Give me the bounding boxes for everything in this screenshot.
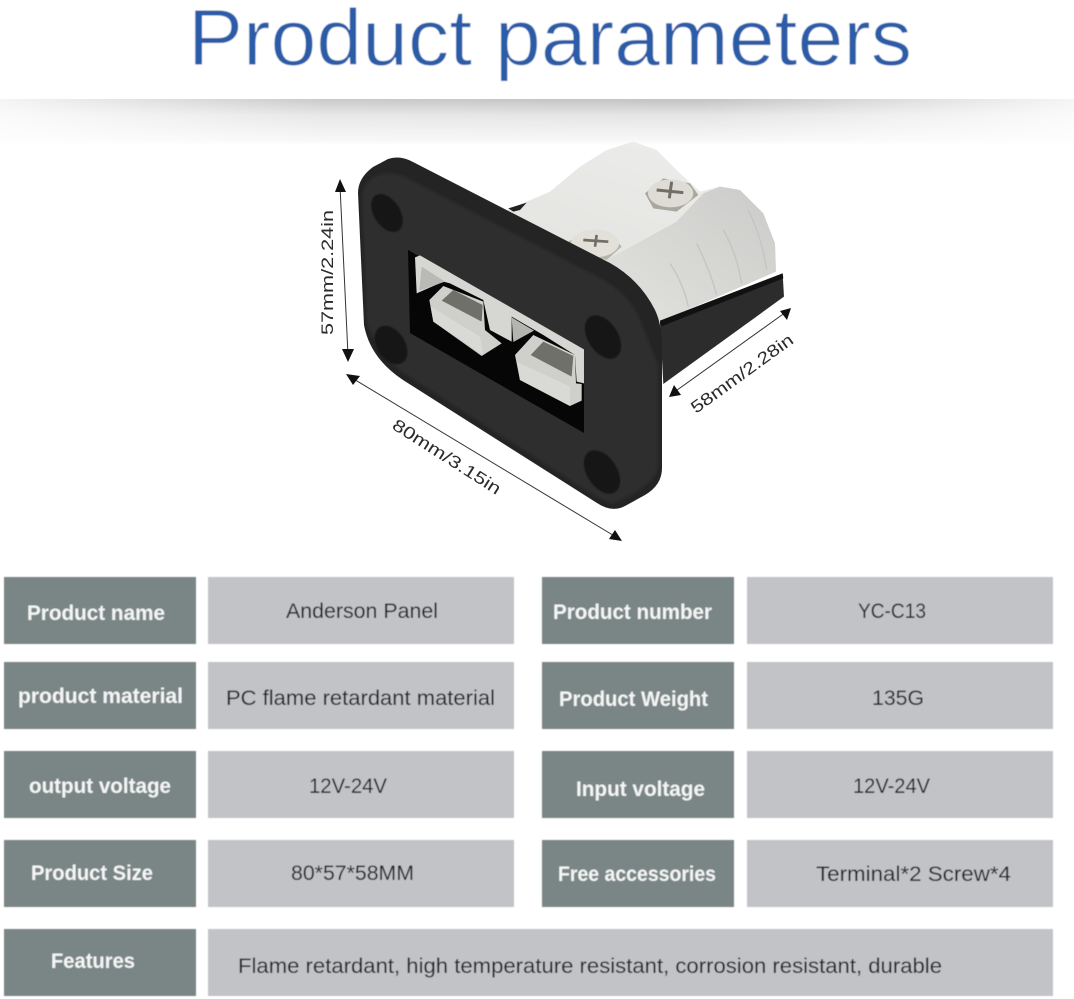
product photo with dimensions <box>318 142 797 541</box>
dimension arrow: height <box>335 179 354 362</box>
dimension arrow: depth <box>669 308 791 397</box>
label: free accessories: Free accessories <box>558 863 716 886</box>
value: PC flame retardant material: PC flame retardant material <box>226 687 495 710</box>
table row 2 <box>4 662 1053 729</box>
label: output voltage <box>4 751 196 818</box>
value: Anderson Panel: Anderson Panel <box>286 600 438 623</box>
value: 135G: 135G <box>872 687 924 710</box>
value: YC-C13 <box>747 577 1053 644</box>
value: input 12V-24V: 12V-24V <box>853 775 930 798</box>
panel window <box>408 250 584 433</box>
mounting holes <box>365 188 629 500</box>
label: features <box>4 929 196 996</box>
connector housing <box>507 142 776 322</box>
label: product size: Product Size <box>31 862 153 885</box>
label: product number: Product number <box>553 601 712 624</box>
value: Terminal*2 Screw*4 <box>747 840 1053 907</box>
label: product material: product material <box>18 685 183 708</box>
value: 80*57*58MM <box>208 840 514 907</box>
bottom bracket fin <box>660 273 784 384</box>
dimension label: 58mm: 58mm/2.28in <box>687 330 797 417</box>
value: 135G <box>747 662 1053 729</box>
label: features: Features <box>51 950 135 973</box>
value: PC flame retardant material <box>208 662 514 729</box>
label: product weight: Product Weight <box>559 688 708 711</box>
value: features list <box>208 929 1053 996</box>
table row 5 <box>4 929 1053 996</box>
label: input voltage: Input voltage <box>576 778 705 801</box>
label: free accessories <box>542 840 734 907</box>
label: output voltage: output voltage <box>29 775 171 798</box>
dimension arrow: width <box>346 374 622 541</box>
black panel <box>358 158 662 509</box>
label: input voltage <box>542 751 734 818</box>
frame <box>415 255 584 383</box>
panel face <box>362 173 658 504</box>
value: output 12V-24V <box>208 751 514 818</box>
dimension label: 80mm: 80mm/3.15in <box>389 415 504 499</box>
label: product weight <box>542 662 734 729</box>
right plug <box>515 335 582 406</box>
label: product material <box>4 662 196 729</box>
value: features list: Flame retardant, high temperature resistant, corrosion resistant, durable <box>238 955 942 978</box>
label: product name: Product name <box>27 602 165 625</box>
label: product name <box>4 577 196 644</box>
table row 3 <box>4 751 1053 818</box>
shadow band under title <box>0 99 1074 145</box>
label: product size <box>4 840 196 907</box>
connector face <box>415 255 584 406</box>
label: product number <box>542 577 734 644</box>
value: Anderson Panel <box>208 577 514 644</box>
value: output 12V-24V: 12V-24V <box>309 775 387 798</box>
value: Terminal*2 Screw*4: Terminal*2 Screw*4 <box>816 863 1011 886</box>
table row 1 <box>4 577 1053 644</box>
left plug <box>429 286 502 356</box>
dimension label: 57mm: 57mm/2.24in <box>318 210 337 335</box>
table row 4 <box>4 840 1053 907</box>
screws <box>568 178 698 260</box>
value: YC-C13: YC-C13 <box>858 600 926 623</box>
value: input 12V-24V <box>747 751 1053 818</box>
value: 80*57*58MM: 80*57*58MM <box>291 862 414 885</box>
